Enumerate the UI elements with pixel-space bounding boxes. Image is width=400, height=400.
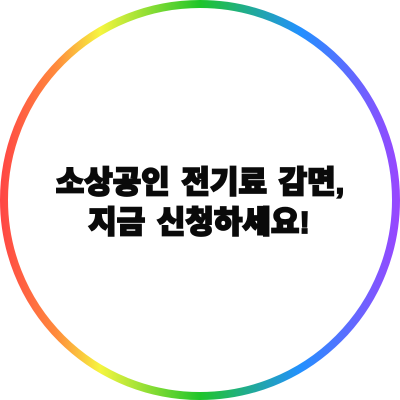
title: 소상공인 전기료 감면,: [56, 165, 344, 200]
title: [56, 165, 344, 240]
title: 지금 신청하세요!: [88, 205, 310, 240]
